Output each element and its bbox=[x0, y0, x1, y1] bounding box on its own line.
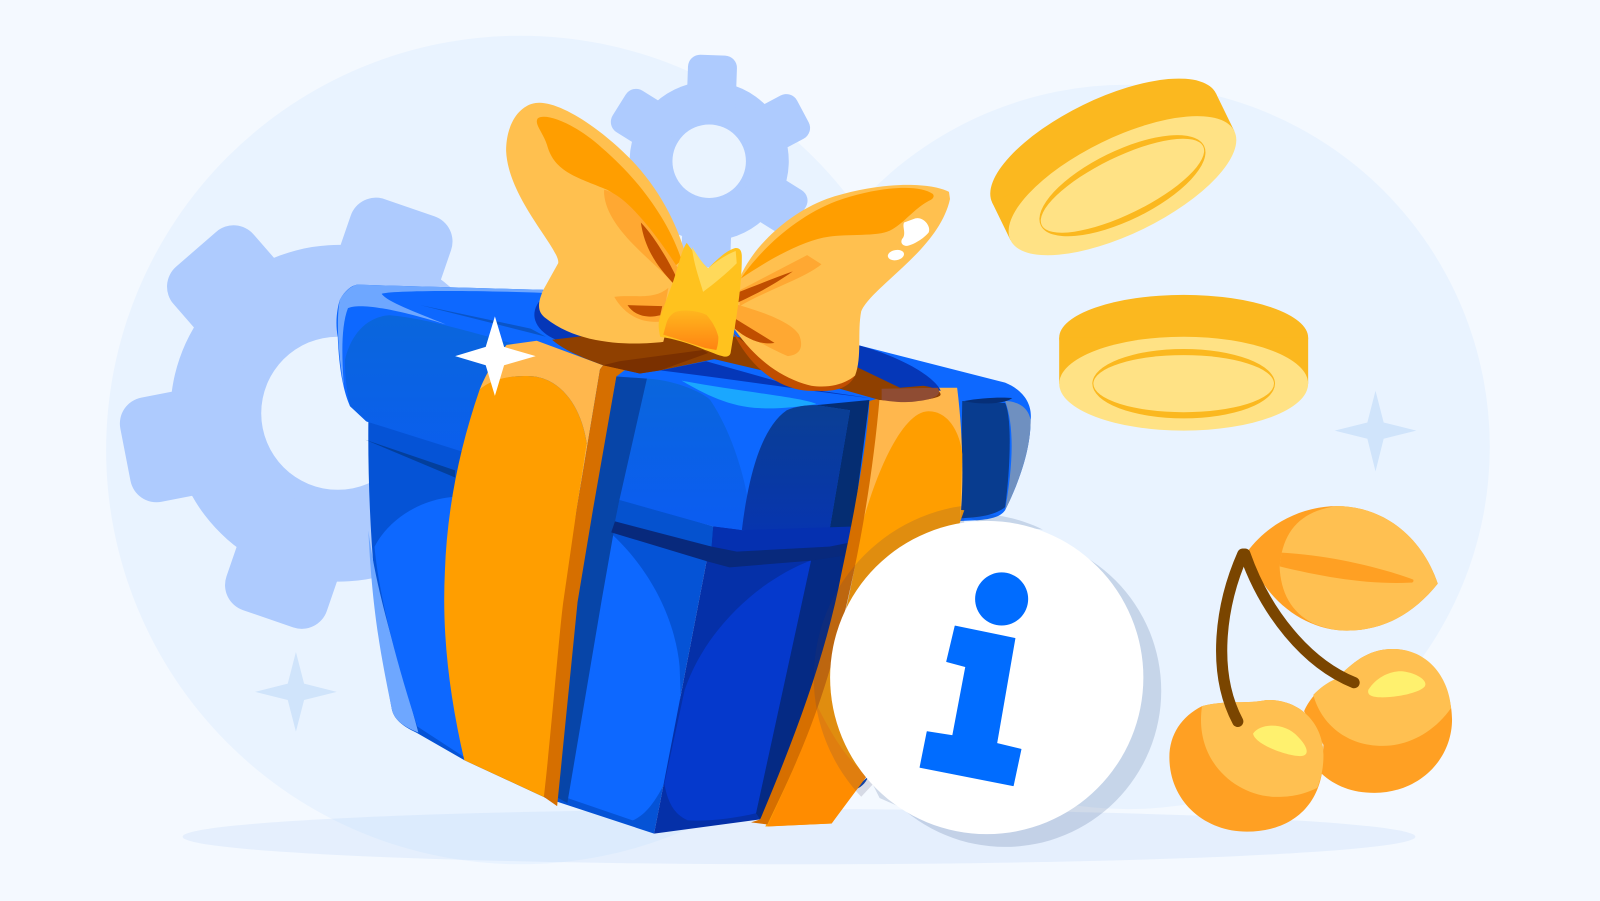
bow knot bbox=[659, 243, 742, 357]
icon: small gear bbox=[601, 52, 817, 271]
cherry stems bbox=[1222, 554, 1354, 721]
info badge shadow bbox=[814, 504, 1161, 851]
leaf bbox=[1247, 506, 1438, 631]
sparkle: right bbox=[1335, 391, 1416, 471]
info glyph bbox=[920, 572, 1028, 786]
bow shadow bbox=[534, 302, 941, 402]
box body: right face bbox=[654, 400, 867, 834]
box corner: blue sliver behind badge bbox=[853, 777, 868, 790]
coin: flat bbox=[1059, 295, 1308, 431]
info badge disc bbox=[830, 521, 1143, 834]
sparkle: white on box bbox=[455, 316, 536, 396]
lid bbox=[336, 285, 1031, 531]
sparkle: lower left bbox=[255, 652, 337, 732]
ribbon: right band bbox=[751, 388, 964, 827]
ground shadow bbox=[183, 809, 1415, 864]
cherry: left bbox=[1169, 700, 1323, 832]
cherry: right bbox=[1304, 649, 1452, 793]
coin: tilted bbox=[971, 50, 1255, 283]
ribbon: left band bbox=[444, 341, 630, 806]
info badge bbox=[814, 504, 1161, 851]
background circle: left bbox=[106, 36, 935, 864]
gift box bbox=[336, 103, 1031, 834]
stripe: dark blue bbox=[556, 377, 647, 803]
cherries bbox=[1169, 506, 1452, 832]
bow bbox=[506, 103, 950, 391]
icon: large gear bbox=[65, 138, 613, 689]
illustration: gift box scene bbox=[106, 36, 1490, 864]
background circle: right bbox=[765, 85, 1490, 809]
box body: left face bbox=[365, 421, 713, 834]
under-lid shadow bbox=[611, 500, 853, 567]
